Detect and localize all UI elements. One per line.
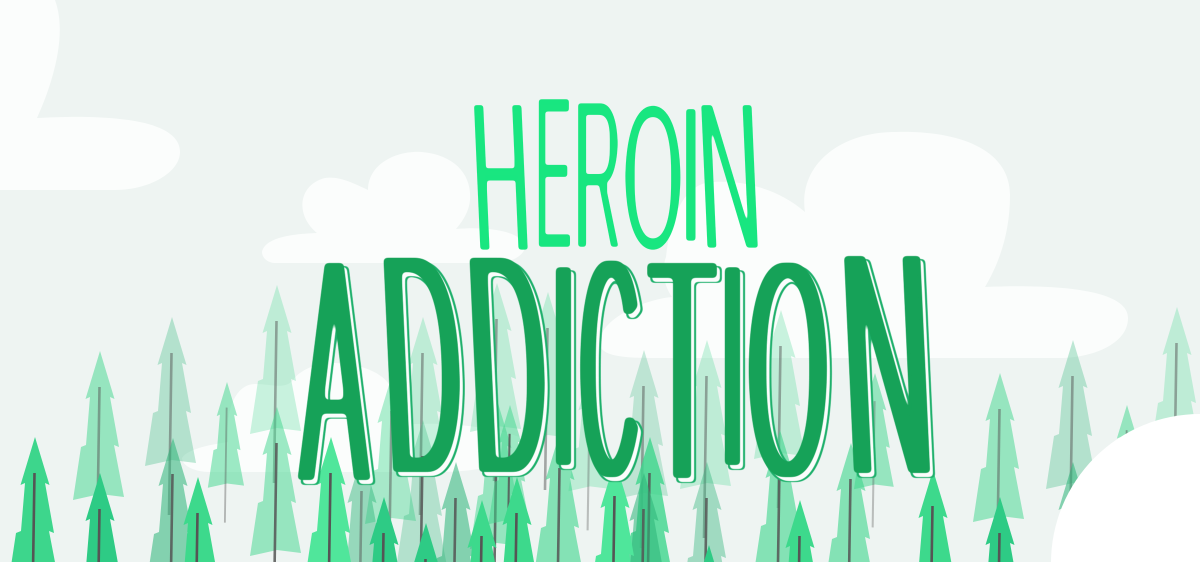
title: ADDICTION: D: [375, 183, 469, 547]
cloud: lower left: [182, 363, 532, 472]
cloud: top left: [0, 0, 180, 190]
title: ADDICTION: [300, 179, 944, 559]
title: ADDICTION: N: [834, 179, 940, 548]
title: ADDICTION: N: [838, 183, 944, 552]
title: ADDICTION: A: [300, 186, 368, 555]
title: HEROIN: E: [535, 50, 572, 297]
title: ADDICTION: I: [726, 200, 747, 538]
title: ADDICTION: C: [584, 195, 642, 552]
title: ADDICTION: I: [557, 200, 578, 538]
title: ADDICTION: O: [752, 197, 832, 550]
cloud: centre: [262, 152, 525, 263]
title: ADDICTION: O: [752, 197, 832, 550]
title: ADDICTION: C: [584, 195, 642, 552]
title: ADDICTION: D: [465, 188, 558, 551]
title: ADDICTION: T: [653, 190, 719, 557]
title: HEROIN: H: [466, 55, 536, 298]
title: ADDICTION: D: [461, 184, 554, 547]
title: ADDICTION: I: [726, 200, 747, 538]
forest: middle layer trees: [146, 400, 1097, 562]
title: ADDICTION: I: [557, 200, 578, 538]
clouds: [0, 0, 1128, 472]
title: ADDICTION: I: [722, 196, 743, 534]
title: HEROIN: N: [693, 56, 766, 296]
title: ADDICTION: D: [465, 188, 558, 551]
title: ADDICTION: T: [653, 190, 719, 557]
title: ADDICTION: O: [748, 193, 828, 546]
title: ADDICTION: I: [553, 196, 574, 534]
title: ADDICTION: A: [304, 190, 372, 559]
forest: back layer trees: [73, 283, 1200, 562]
title: ADDICTION: D: [379, 187, 473, 551]
title: HEROIN: I: [680, 64, 702, 285]
title: HEROIN: R: [574, 55, 622, 295]
title: ADDICTION: A: [304, 190, 372, 559]
hill: bottom right white mound: [1051, 414, 1200, 562]
cloud: large right: [600, 132, 1128, 358]
title: ADDICTION: D: [379, 187, 473, 551]
title: ADDICTION: N: [838, 183, 944, 552]
forest: front layer trees: [8, 437, 1024, 562]
title: ADDICTION: C: [580, 191, 638, 548]
title: HEROIN: [466, 50, 766, 298]
title: HEROIN: O: [623, 60, 683, 295]
title: ADDICTION: T: [649, 186, 715, 553]
